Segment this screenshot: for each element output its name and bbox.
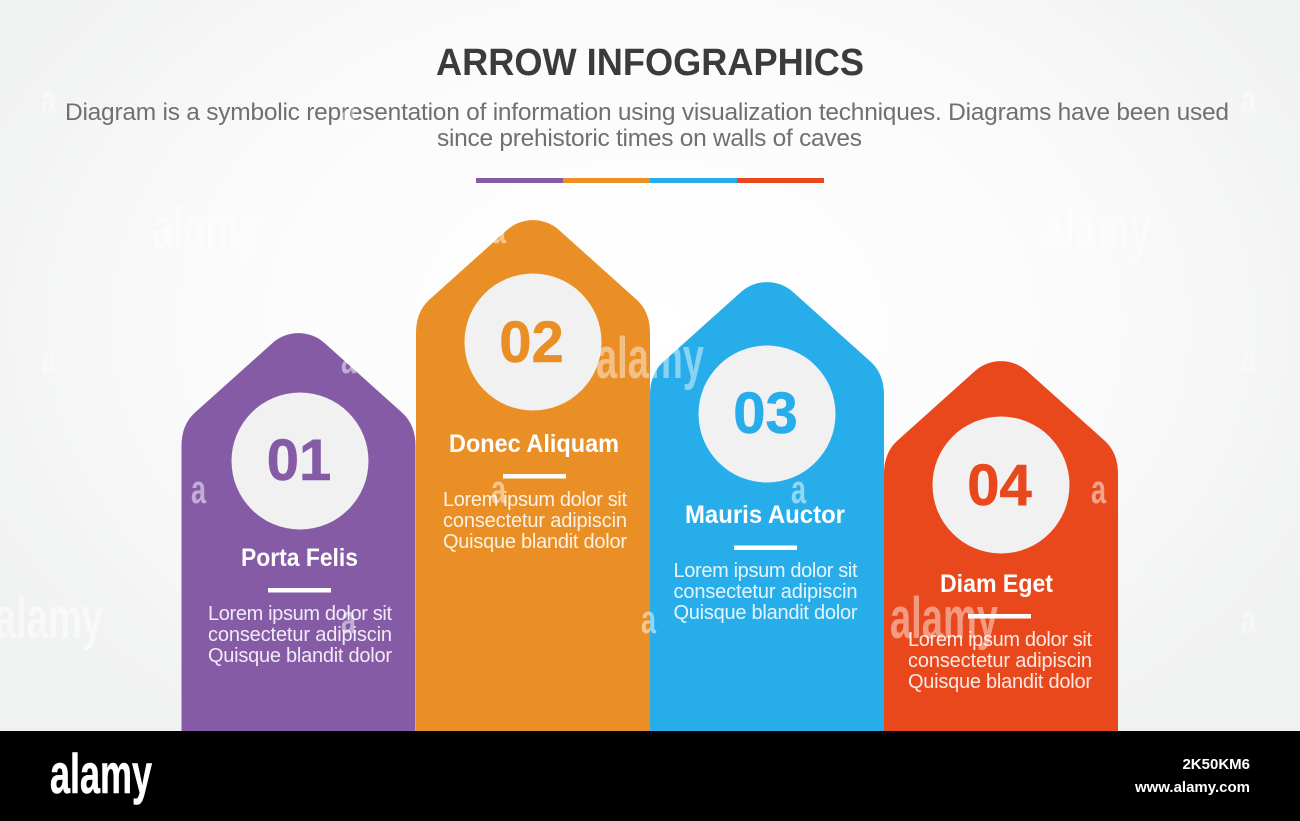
watermarks: a: [341, 598, 357, 642]
description 02: Lorem ipsum dolor sit: [443, 489, 627, 511]
panel: step 02 arrow: [416, 220, 650, 731]
number badge 04: 04: [967, 453, 1032, 518]
watermarks: a: [41, 338, 57, 382]
watermarks: alamy: [596, 326, 704, 391]
watermarks: a: [1091, 468, 1107, 512]
description 04: [908, 629, 1092, 693]
watermarks: [0, 78, 1257, 651]
watermarks: a: [791, 468, 807, 512]
description 01: Lorem ipsum dolor sit: [208, 603, 392, 625]
rule 03: [734, 546, 797, 550]
description 02: [443, 489, 627, 553]
watermarks: a: [341, 88, 357, 132]
watermarks: a: [1241, 598, 1257, 642]
watermarks: a: [41, 78, 57, 122]
arrow shape 01: [182, 333, 416, 731]
arrow shape 02: [416, 220, 650, 731]
watermarks: a: [191, 468, 207, 512]
number badge 01: [232, 392, 368, 530]
title: ARROW INFOGRAPHICS: [436, 42, 864, 84]
rule 02: [503, 474, 566, 478]
watermarks: a: [1241, 338, 1257, 382]
number badge 02: 02: [499, 310, 564, 375]
rule 01: [268, 588, 331, 592]
website: www.alamy.com: [1134, 779, 1250, 796]
panel: step 04 arrow: [884, 361, 1118, 731]
watermarks: a: [641, 598, 657, 642]
footer logo: alamy: [50, 742, 152, 805]
four-colour divider bar: [476, 178, 824, 183]
heading 01: Porta Felis: [241, 544, 358, 572]
description 03: [674, 560, 858, 624]
description 04: Lorem ipsum dolor sit: [908, 629, 1092, 651]
description 01: [208, 603, 392, 667]
description 04: Quisque blandit dolor: [908, 671, 1092, 693]
watermarks: a: [1241, 78, 1257, 122]
panel: step 01 arrow: [182, 333, 416, 731]
black footer strip: [0, 731, 1300, 821]
heading 03: Mauris Auctor: [685, 501, 845, 529]
description 02: consectetur adipiscin: [443, 510, 627, 532]
image id: 2K50KM6: [1182, 756, 1250, 773]
description 04: consectetur adipiscin: [908, 650, 1092, 672]
description 03: Quisque blandit dolor: [674, 602, 858, 624]
number badge 03: 03: [733, 381, 798, 446]
description 03: Lorem ipsum dolor sit: [674, 560, 858, 582]
watermarks: a: [941, 338, 957, 382]
arrow shape 03: [650, 282, 884, 731]
number badge 03: [698, 346, 836, 482]
watermarks: a: [341, 338, 357, 382]
watermarks: alamy: [152, 196, 260, 261]
subtitle text: [65, 99, 1229, 152]
heading 04: Diam Eget: [940, 570, 1054, 598]
watermarks: alamy: [890, 586, 998, 651]
number badge 04: [932, 416, 1070, 554]
subtitle text: since prehistoric times on walls of caves: [437, 125, 862, 152]
rule 04: [968, 614, 1031, 618]
heading 02: Donec Aliquam: [449, 430, 619, 458]
watermarks: a: [491, 208, 507, 252]
description 01: consectetur adipiscin: [208, 624, 392, 646]
panel: step 03 arrow: [650, 282, 884, 731]
subtitle text: Diagram is a symbolic representation of information using visualization techniques. Diagrams have been used: [65, 99, 1229, 126]
watermarks: a: [491, 468, 507, 512]
number badge 01: 01: [267, 428, 331, 493]
description 01: Quisque blandit dolor: [208, 645, 392, 667]
number badge 02: [464, 274, 602, 410]
description 02: Quisque blandit dolor: [443, 531, 627, 553]
arrow shape 04: [884, 361, 1118, 731]
description 03: consectetur adipiscin: [674, 581, 858, 603]
watermarks: alamy: [1043, 196, 1151, 261]
